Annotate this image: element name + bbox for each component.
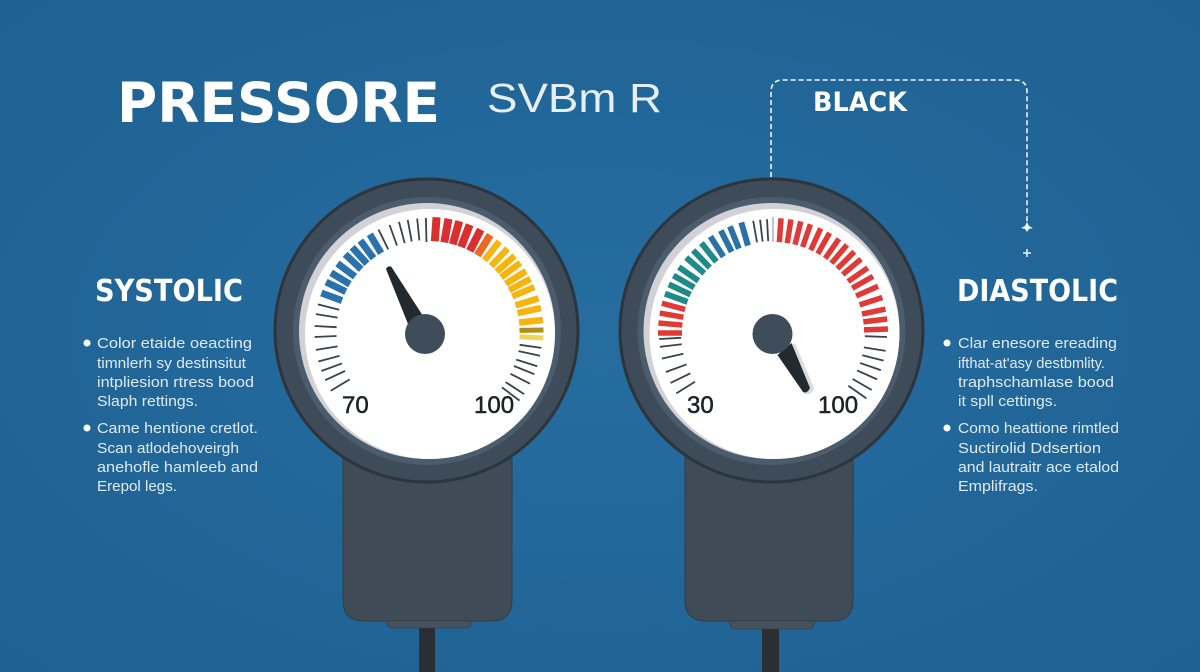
- cable: [762, 620, 779, 672]
- bullet block 4: Emplifrags.: [958, 479, 1038, 495]
- bullet block 4: Como heattione rimtled: [958, 421, 1119, 437]
- bullet block 1: timnlerh sy destinsitut: [97, 356, 246, 372]
- bullet block 2: Erepol legs.: [97, 479, 177, 495]
- gauge body: [343, 440, 512, 621]
- needle: [386, 266, 423, 324]
- bullet block 1: Slaph rettings.: [97, 394, 198, 410]
- scale label: 30: 30: [687, 392, 714, 419]
- inner ring: [638, 197, 906, 465]
- title: PRESSORE: [117, 71, 440, 135]
- hub: [752, 314, 792, 354]
- bullet block 4: Suctirolid Ddsertion: [958, 441, 1101, 457]
- bullet block 1: Color etaide oeacting: [97, 336, 252, 352]
- gauge: systolic: [275, 179, 578, 672]
- bullet block 2: Scan atlodehoveirgh: [97, 441, 239, 457]
- hub: [405, 314, 445, 354]
- bullet block 1: intpliesion rtress bood: [97, 375, 254, 391]
- bullet block 1: [84, 336, 254, 410]
- needle shadow: [792, 343, 814, 394]
- connector tab: [387, 618, 471, 628]
- ticks: [658, 217, 888, 398]
- bullet block 4: and lautraitr ace etalod: [958, 460, 1119, 476]
- scale label: 100: 100: [474, 392, 514, 419]
- cable: [419, 620, 435, 672]
- subtitle: SVBm R: [487, 75, 662, 121]
- bullet block 3: Clar enesore ereading: [958, 336, 1117, 352]
- panel: diastolic text: [944, 274, 1119, 495]
- bullet block 3: [944, 336, 1117, 410]
- gauge: diastolic: [620, 179, 923, 672]
- gauge body: [685, 440, 853, 621]
- dial face: [644, 203, 900, 459]
- scale label: 100: 100: [818, 392, 858, 419]
- scale label: 70: 70: [342, 392, 369, 419]
- bullet block 4: [944, 421, 1119, 495]
- needle: [778, 343, 810, 392]
- bullet block 3: ifthat-at'asy destbmlity.: [958, 356, 1105, 372]
- outer bezel: [620, 179, 923, 482]
- panel: systolic text: [84, 274, 258, 495]
- bullet block 2: Came hentione cretlot.: [97, 421, 258, 437]
- heading: systolic: SYSTOLIC: [95, 274, 243, 309]
- connector tab: [730, 618, 814, 629]
- heading: diastolic: DIASTOLIC: [957, 274, 1118, 309]
- bullet block 2: [84, 421, 258, 495]
- bullet block 3: it spll cettings.: [958, 394, 1057, 410]
- ticks: [315, 217, 543, 401]
- bullet block 2: anehofle hamleeb and: [97, 460, 258, 476]
- inner ring: [293, 197, 561, 465]
- label: black: BLACK: [813, 87, 908, 118]
- bullet block 3: traphschamlase bood: [958, 375, 1114, 391]
- outer bezel: [275, 179, 578, 482]
- dashed connector arrow: [771, 80, 1033, 257]
- dial face: [299, 203, 555, 459]
